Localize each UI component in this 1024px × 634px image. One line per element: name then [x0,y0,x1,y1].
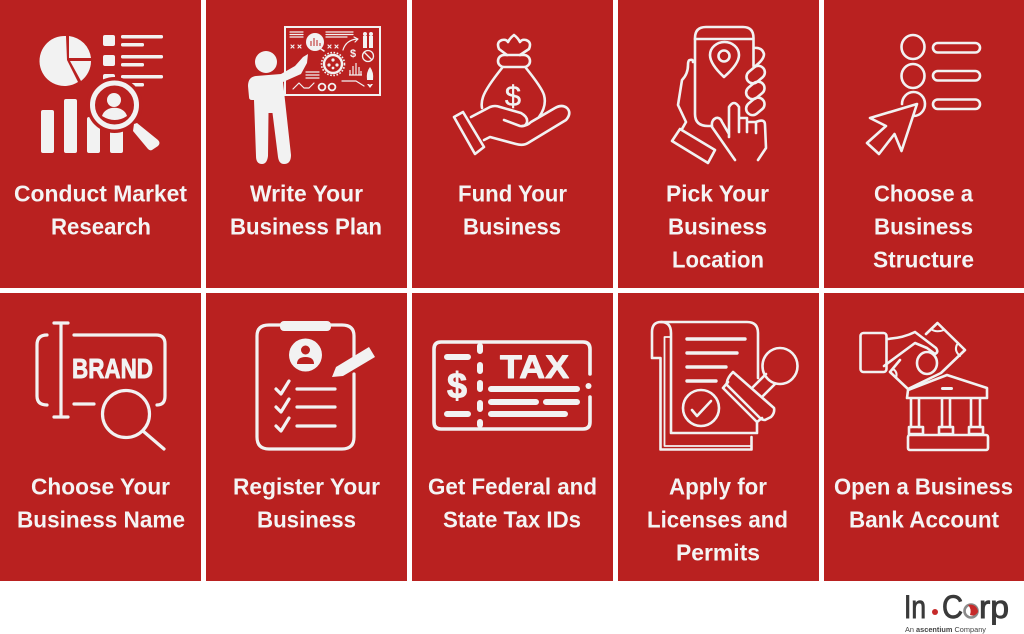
heading: conduct market research [14,180,187,240]
heading: choose your business name [17,474,185,532]
heading: conduct market research: Conduct Market [14,180,187,206]
heading: apply for licenses and permits [647,474,788,566]
logo: InCorp: An ascentium Company [905,625,986,634]
panel: apply for licenses and permits [618,293,819,581]
heading: get federal and state tax ids: State Tax IDs [443,506,581,532]
logo: InCorp [904,589,1009,634]
icon: tax ticket: $ [447,365,467,406]
icon: hand holding phone with location pin [672,27,768,163]
heading: get federal and state tax ids: Get Federal and [428,474,597,500]
heading: apply for licenses and permits: Licenses and [647,506,788,532]
icon: charts and magnifier [40,35,163,153]
panel: register your business [206,293,407,581]
heading: open a business bank account: Bank Account [849,506,999,532]
icon: hand holding money bag [454,35,569,154]
heading: pick your business location: Location [672,246,764,272]
heading: fund your business [458,180,567,240]
heading: choose your business name: Choose Your [31,474,170,500]
heading: choose your business name: Business Name [17,506,185,532]
icon: hand holding money bag: $ [505,81,521,113]
heading: get federal and state tax ids [428,474,597,532]
heading: write your business plan: Business Plan [230,214,382,240]
heading: pick your business location: Business [668,214,767,240]
logo: InCorp: C [942,589,963,625]
heading: apply for licenses and permits: Permits [676,540,760,566]
heading: choose a business structure: Choose a [874,180,973,206]
icon: list with cursor [867,35,980,154]
heading: register your business [233,474,380,532]
heading: choose a business structure: Structure [873,246,974,272]
heading: choose a business structure [873,180,974,272]
panel: choose your business name [0,293,201,581]
panel: open a business bank account [824,293,1024,581]
heading: choose a business structure: Business [874,214,973,240]
heading: fund your business: Fund Your [458,180,567,206]
heading: register your business: Register Your [233,474,380,500]
heading: write your business plan [230,180,382,240]
icon: brand search: BRAND [72,353,153,384]
icon: document and stamp [652,322,798,450]
heading: pick your business location [666,180,769,272]
heading: write your business plan: Write Your [250,180,363,206]
logo: InCorp: In [904,589,926,625]
icon: tax ticket [434,342,592,429]
heading: fund your business: Business [463,214,561,240]
panel: pick your business location [618,0,819,288]
heading: open a business bank account [834,474,1013,532]
logo: InCorp: rp [979,589,1009,625]
heading: pick your business location: Pick Your [666,180,769,206]
icon: person presenting at board [248,27,380,164]
heading: open a business bank account: Open a Business [834,474,1013,500]
panel: fund your business [412,0,613,288]
icon: brand search [37,323,165,449]
panel: write your business plan [206,0,407,288]
icon: person presenting at board: $ [350,48,356,60]
heading: conduct market research: Research [51,214,151,240]
heading: apply for licenses and permits: Apply for [669,474,767,500]
panel: choose a business structure [824,0,1024,288]
heading: register your business: Business [257,506,356,532]
icon: hand, money and bank [860,323,988,450]
panel: get federal and state tax ids [412,293,613,581]
panel: conduct market research [0,0,201,288]
icon: clipboard with checklist [257,321,375,449]
icon: tax ticket: TAX [500,349,570,385]
